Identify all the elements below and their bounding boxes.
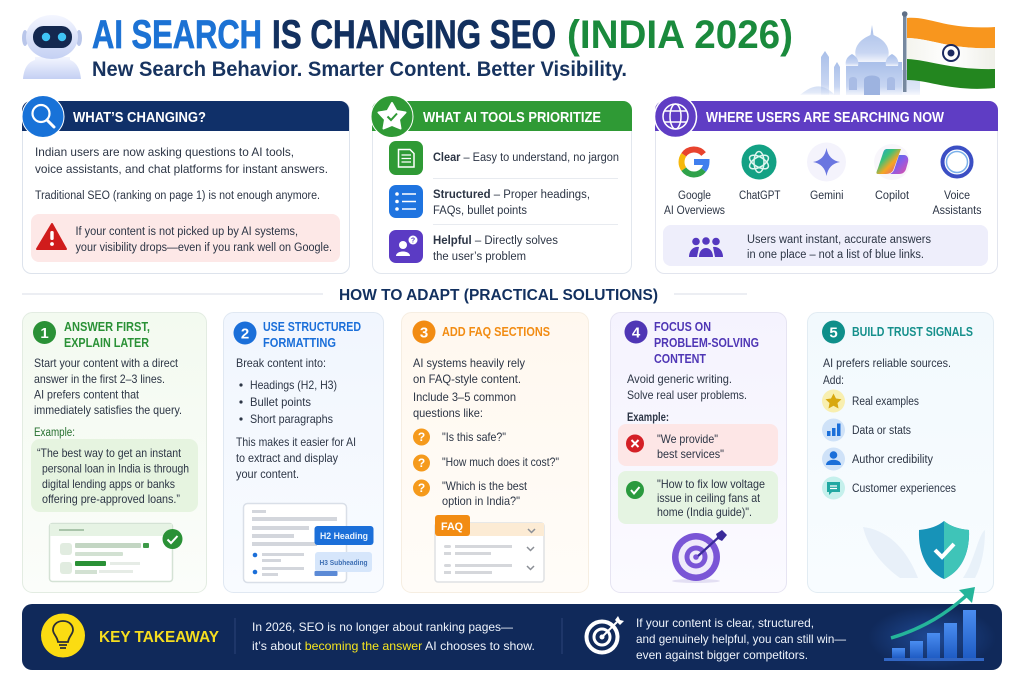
number badge (624, 320, 648, 344)
text block: AI systems heavily rely (413, 356, 525, 370)
example box: personal loan in India is through (42, 462, 189, 476)
good example (618, 471, 778, 524)
good example: issue in ceiling fans at (657, 491, 761, 505)
panel: where users are searching now (654, 96, 998, 274)
illustration: formatted document (244, 504, 374, 582)
item: helpful: the user’s problem (433, 251, 526, 263)
question list: ? (418, 430, 425, 444)
panel: add FAQ sections (402, 312, 588, 592)
panel: problem-solving content (610, 312, 786, 592)
question list: ? (418, 456, 425, 470)
text block (636, 616, 846, 662)
panel: build trust signals (808, 312, 994, 592)
text block: voice assistants, and chat platforms for instant answers. (35, 162, 328, 176)
text block: This makes it easier for AI (236, 435, 356, 449)
text block: questions like: (413, 406, 483, 420)
illustration: FAQ accordion: FAQ (441, 521, 463, 533)
item: helpful (389, 230, 558, 263)
text block: If your content is clear, structured, (636, 616, 814, 630)
item: helpful: Helpful – Directly solves (433, 235, 558, 247)
title: AI SEARCH (92, 13, 262, 57)
platform labels: ChatGPT (739, 190, 780, 202)
text block: even against bigger competitors. (636, 648, 808, 662)
panel: answer first (22, 312, 206, 592)
icon: light bulb (41, 614, 85, 658)
text block (236, 435, 356, 481)
title: (INDIA 2026) (567, 13, 793, 57)
text block: your content. (236, 467, 299, 481)
illustration: formatted document: H2 Heading (320, 531, 368, 542)
heading (654, 320, 759, 366)
bad example (618, 424, 778, 466)
text block (35, 145, 328, 202)
icon: target (586, 616, 624, 652)
icon: Indian flag (902, 11, 995, 92)
example box: offering pre-approved loans.” (42, 492, 180, 506)
title: IS CHANGING SEO (272, 13, 556, 57)
heading: BUILD TRUST SIGNALS (852, 325, 973, 339)
text block: answer in the first 2–3 lines. (34, 372, 165, 386)
text block: Indian users are now asking questions to AI tools, (35, 145, 294, 159)
icon: voice assistant (942, 148, 972, 176)
platform labels: Gemini (810, 190, 844, 202)
good example: home (India guide)". (657, 505, 752, 519)
text block: AI prefers content that (34, 388, 140, 402)
icon: Taj Mahal (800, 25, 920, 95)
icon: magnifier (22, 96, 64, 138)
number badge (412, 320, 436, 344)
trust signal: customer experiences: Customer experiences (852, 483, 956, 495)
arrow: growth (891, 587, 975, 638)
text block: Start your content with a direct (34, 356, 179, 370)
chart: growth bars (868, 606, 996, 669)
heading: FOCUS ON (654, 320, 711, 334)
trust signal: customer experiences (822, 476, 956, 500)
callout: users want instant answers (663, 225, 988, 266)
example box (31, 439, 198, 512)
platform labels: Google (678, 190, 711, 202)
platform labels: Assistants (932, 205, 982, 217)
trust signal: data or stats: Data or stats (852, 425, 911, 437)
example label: Example: (627, 412, 669, 424)
callout: users want instant answers: in one place – not a list of blue links. (747, 249, 924, 261)
heading: WHAT’S CHANGING? (73, 110, 206, 126)
question list: "Which is the best (442, 479, 528, 493)
icon: Gemini (807, 142, 846, 182)
icon: Copilot (874, 144, 910, 180)
heading: CONTENT (654, 352, 706, 366)
example label: Example: (34, 427, 75, 439)
heading: WHERE USERS ARE SEARCHING NOW (706, 110, 944, 126)
text block: Solve real user problems. (627, 388, 747, 402)
item: helpful: ? (411, 238, 415, 244)
question list: "Is this safe?" (442, 430, 506, 444)
platform labels: Copilot (875, 190, 910, 202)
illustration: formatted document: H3 Subheading (320, 558, 368, 567)
item: clear: Clear – Easy to understand, no jargon (433, 152, 619, 164)
icon: target (672, 530, 727, 583)
text block (34, 356, 182, 417)
panel: what AI tools prioritize (371, 96, 632, 274)
heading: PROBLEM-SOLVING (654, 336, 759, 350)
panel: what's changing (22, 96, 350, 274)
title (92, 13, 793, 57)
example box: “The best way to get an instant (37, 446, 182, 460)
illustration: search result (50, 524, 182, 582)
bullet list: Headings (H2, H3) (250, 378, 337, 392)
number badge: 2 (241, 326, 249, 342)
bullet list: Short paragraphs (250, 412, 333, 426)
question list: option in India?" (442, 494, 520, 508)
bad example: "We provide" (657, 432, 718, 446)
bullet list (239, 378, 337, 426)
heading: EXPLAIN LATER (64, 336, 149, 350)
question list: "How much does it cost?" (442, 455, 559, 469)
text block (627, 372, 747, 402)
platform labels (664, 190, 982, 217)
bullet list: Bullet points (250, 395, 311, 409)
text block (823, 356, 951, 387)
number badge: 3 (420, 324, 428, 342)
trust signal: author credibility (822, 448, 933, 470)
text block: Add: (823, 373, 844, 387)
text block: Avoid generic writing. (627, 372, 732, 386)
number badge (822, 320, 845, 344)
heading (263, 320, 361, 350)
heading: KEY TAKEAWAY (99, 629, 219, 646)
trust signal: author credibility: Author credibility (852, 454, 933, 466)
heading: USE STRUCTURED (263, 320, 361, 334)
text block: to extract and display (236, 451, 338, 465)
question list: ? (418, 481, 425, 495)
icon: shield with leaves (863, 521, 985, 579)
good example: "How to fix low voltage (657, 477, 765, 491)
text block: Break content into: (236, 356, 326, 370)
text block: it’s about becoming the answer AI chooses to show. (252, 639, 535, 653)
heading: ANSWER FIRST, (64, 320, 150, 334)
panel: use structured formatting (224, 312, 384, 592)
text block: Include 3–5 common (413, 390, 516, 404)
text block: In 2026, SEO is no longer about ranking pages— (252, 620, 513, 634)
item: structured (389, 185, 590, 218)
heading: ADD FAQ SECTIONS (442, 325, 550, 339)
trust signal: data or stats (822, 418, 911, 442)
number badge (234, 322, 256, 344)
icon: star check (371, 96, 413, 138)
question list (413, 428, 559, 508)
heading: FORMATTING (263, 336, 336, 350)
icon: Google (682, 150, 706, 174)
heading: WHAT AI TOOLS PRIORITIZE (423, 110, 601, 126)
section heading: HOW TO ADAPT (PRACTICAL SOLUTIONS) (339, 287, 658, 304)
callout: warning: If your content is not picked up by AI systems, (76, 226, 298, 238)
heading (64, 320, 150, 350)
number badge: 1 (40, 325, 49, 342)
text block (413, 356, 525, 420)
subtitle: New Search Behavior. Smarter Content. Better Visibility. (92, 57, 627, 81)
platform labels: AI Overviews (664, 205, 725, 217)
callout: warning (31, 214, 340, 262)
illustration: FAQ accordion (435, 515, 544, 582)
icon: ChatGPT (742, 144, 776, 180)
bad example: best services" (657, 447, 724, 461)
text block: AI prefers reliable sources. (823, 356, 951, 370)
callout: warning: your visibility drops—even if you rank well on Google. (76, 242, 332, 254)
text block: on FAQ-style content. (413, 372, 521, 386)
text block: and genuinely helpful, you can still win— (636, 632, 846, 646)
trust signal: real examples: Real examples (852, 396, 919, 408)
icon: globe (654, 96, 696, 138)
text block (252, 620, 535, 653)
text block: immediately satisfies the query. (34, 403, 182, 417)
item: structured: Structured – Proper headings, (433, 189, 590, 201)
number badge: 4 (632, 324, 641, 342)
platform labels: Voice (944, 190, 970, 202)
text block: Traditional SEO (ranking on page 1) is not enough anymore. (35, 190, 320, 202)
trust signal: real examples (822, 390, 919, 412)
icon: robot mascot (22, 15, 82, 79)
number badge: 5 (829, 324, 838, 342)
banner: key takeaway (22, 604, 1002, 670)
item: structured: FAQs, bullet points (433, 205, 527, 217)
callout: users want instant answers: Users want instant, accurate answers (747, 234, 931, 246)
number badge (33, 321, 56, 344)
example box: digital lending apps or banks (42, 477, 175, 491)
item: clear (389, 141, 619, 175)
